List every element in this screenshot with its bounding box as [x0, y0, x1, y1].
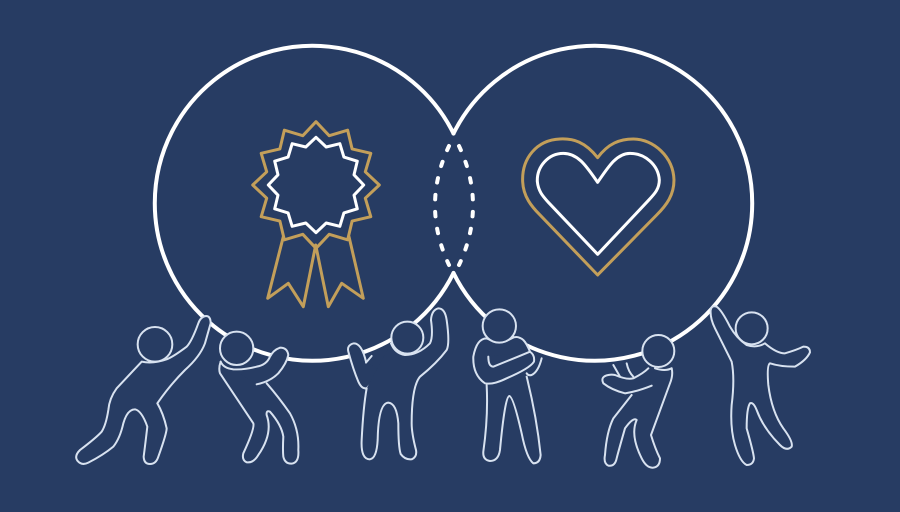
left circle — [155, 46, 454, 361]
rosette inner white star — [268, 137, 364, 233]
right circle — [454, 46, 752, 361]
icon: award ribbon rosette — [253, 122, 379, 307]
figures 1 and 2: people pushing the left circle — [76, 316, 298, 464]
figures 3 and 4: people at the centre — [348, 308, 542, 463]
icon: double outline heart — [523, 139, 674, 275]
heart inner white outline — [537, 153, 659, 254]
figures 5 and 6: people pushing the right circle — [602, 306, 810, 468]
rosette outer gold star — [253, 122, 379, 248]
dashed overlap lens — [435, 146, 473, 265]
figure 6 — [711, 306, 810, 465]
ribbon tails — [268, 237, 363, 307]
figure 1 — [76, 316, 211, 464]
heart outer gold outline — [523, 139, 674, 275]
figure 2 — [219, 332, 298, 464]
figure 3 — [348, 308, 448, 459]
figure 5 — [602, 335, 674, 468]
figure 4 — [473, 309, 542, 463]
